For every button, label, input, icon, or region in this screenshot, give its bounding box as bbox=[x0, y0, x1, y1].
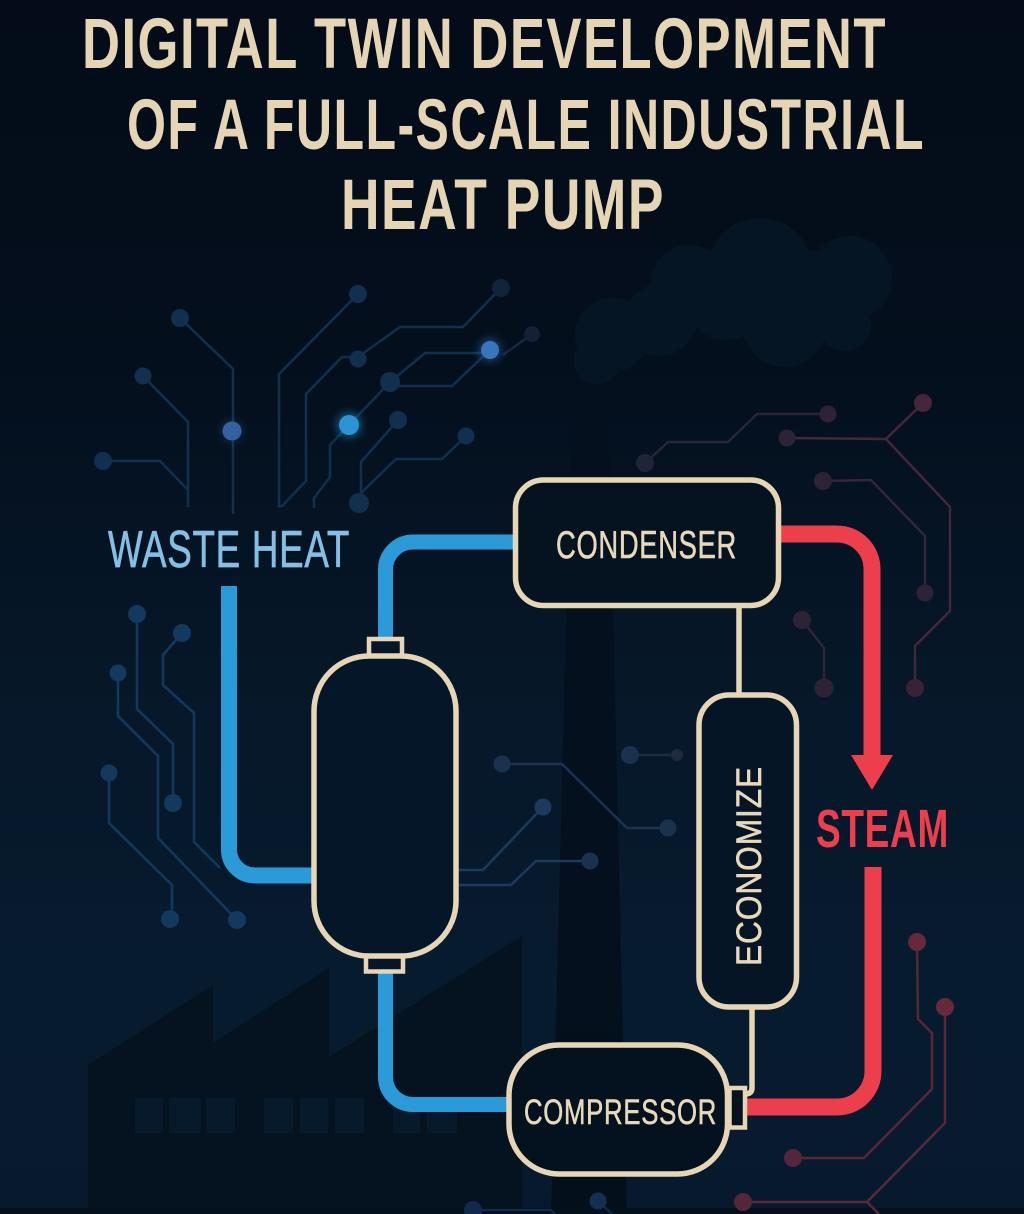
waste heat label: WASTE HEAT bbox=[108, 521, 350, 579]
upper right circuit nodes bbox=[636, 394, 934, 698]
upper left circuit nodes bbox=[94, 279, 540, 513]
circuit traces: centre bbox=[455, 746, 683, 885]
compressor box bbox=[509, 1045, 745, 1174]
left circuit nodes bbox=[100, 605, 246, 929]
circuit traces: left blue bbox=[100, 605, 246, 929]
red pipe: condenser to steam arrow bbox=[779, 534, 872, 756]
circuit traces: upper left blue bbox=[94, 279, 540, 514]
waste heat inlet pipe bbox=[229, 586, 314, 876]
factory windows bbox=[135, 1098, 457, 1133]
title bbox=[82, 5, 925, 245]
background: chimney silhouette bbox=[551, 385, 627, 1214]
circuit traces: upper right red bbox=[636, 394, 950, 698]
lower right circuit nodes bbox=[734, 933, 954, 1211]
background: factory silhouette bbox=[88, 936, 522, 1214]
centre circuit nodes bbox=[494, 746, 683, 870]
economizer box: ECONOMIZE bbox=[730, 766, 769, 966]
glowing nodes bbox=[221, 338, 502, 442]
circuit traces: bottom edge bbox=[464, 1192, 612, 1214]
background: smoke cloud bbox=[574, 218, 892, 384]
circuit traces: lower right red bbox=[734, 933, 954, 1214]
blue pipe: condenser to evaporator bbox=[386, 542, 515, 638]
condenser box: CONDENSER bbox=[556, 524, 737, 567]
economizer box bbox=[699, 695, 796, 1007]
evaporator vessel bbox=[314, 639, 456, 972]
connector: condenser to economizer bbox=[736, 605, 742, 696]
compressor box: COMPRESSOR bbox=[524, 1093, 717, 1132]
arrow: steam direction bbox=[851, 755, 893, 790]
condenser box bbox=[516, 480, 778, 606]
ground strip bbox=[0, 1208, 1024, 1214]
steam label: STEAM bbox=[816, 799, 949, 859]
title: HEAT PUMP bbox=[341, 166, 665, 245]
connector: economizer to compressor bbox=[745, 1008, 752, 1094]
blue pipe: evaporator to compressor bbox=[386, 972, 509, 1104]
red pipe: steam to compressor bbox=[746, 867, 873, 1107]
